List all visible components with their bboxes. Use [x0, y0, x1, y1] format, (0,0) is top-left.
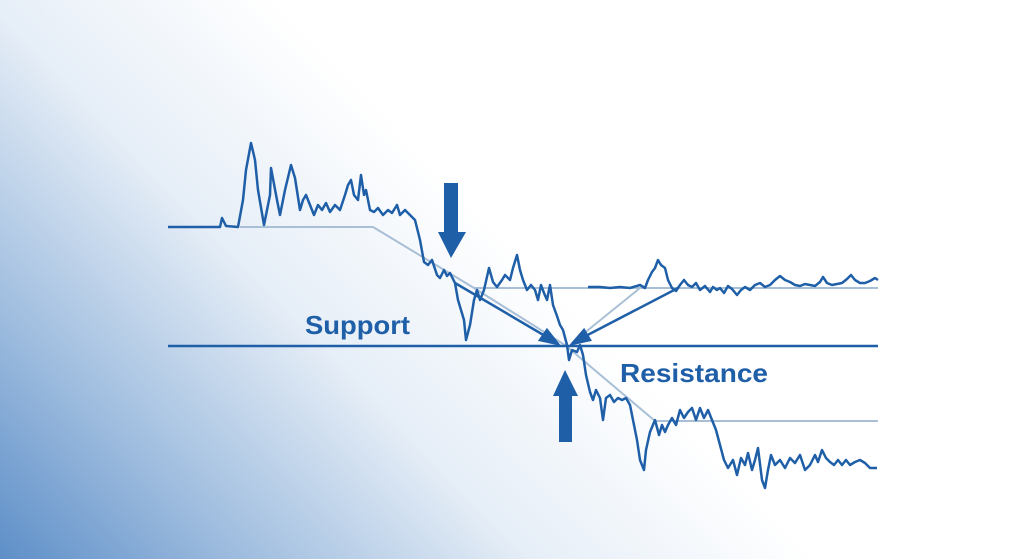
icon: up arrow: [553, 370, 578, 442]
support line: [168, 345, 878, 347]
price line upper right: [588, 260, 878, 295]
price line main: [168, 143, 877, 488]
arrow: converging left: [455, 283, 558, 344]
light trend lines: [240, 227, 878, 421]
label: Resistance: Resistance: [620, 358, 768, 388]
arrow: converging right: [572, 288, 678, 344]
icon: down arrow: [438, 183, 466, 258]
label: Support: Support: [305, 310, 410, 340]
